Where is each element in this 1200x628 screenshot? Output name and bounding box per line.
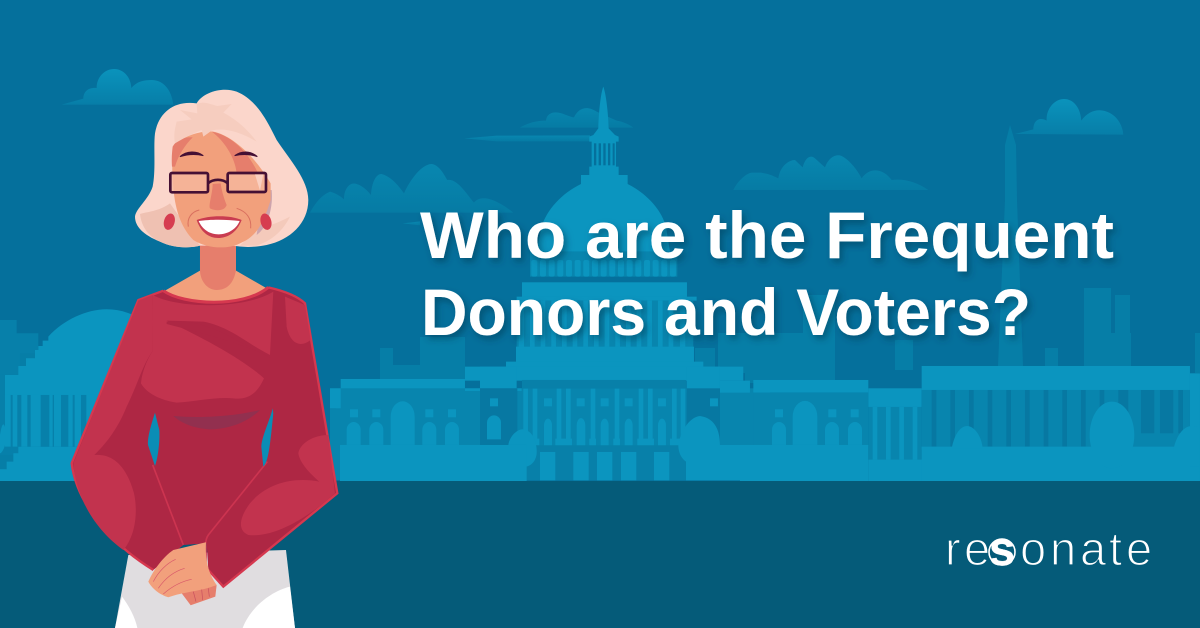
cloud: left of dome	[310, 164, 513, 225]
nose	[210, 183, 227, 210]
woman illustration	[72, 90, 337, 628]
hand	[148, 542, 217, 597]
title	[420, 198, 1114, 349]
hair	[135, 90, 308, 247]
seams	[153, 462, 267, 567]
arm gaps	[148, 413, 159, 466]
wrist	[182, 585, 217, 605]
bangs	[174, 103, 257, 143]
dome and tholos	[465, 87, 743, 381]
head and neck	[135, 90, 308, 313]
glasses	[170, 173, 266, 192]
neck and chest	[163, 243, 268, 313]
cloud: top left	[62, 69, 173, 105]
capitol lower body, left wing, centre portico	[330, 379, 770, 480]
neckline trim	[163, 287, 268, 302]
pants	[115, 550, 295, 628]
sweater highlights	[73, 292, 335, 550]
memorial building at left	[0, 309, 137, 483]
title: Donors and Voters?	[421, 275, 1031, 349]
eyebrows	[180, 152, 203, 157]
washington monument	[998, 125, 1023, 366]
sweater	[72, 287, 337, 605]
cloud: top right	[1015, 99, 1123, 135]
capitol building	[330, 87, 925, 482]
right colonnade building	[922, 366, 1200, 482]
sky background	[0, 0, 1200, 482]
sweater folds	[167, 321, 273, 359]
title: Who are the Frequent	[420, 198, 1114, 272]
earrings	[162, 212, 177, 231]
left wing windows and arches	[330, 401, 527, 482]
far skyline buildings	[0, 288, 1200, 480]
mouth	[197, 216, 242, 238]
smile lines	[188, 208, 251, 228]
cloud: right of dome	[733, 155, 928, 190]
ground band	[0, 481, 1200, 628]
face	[172, 131, 271, 247]
logo: resonate: resonate	[945, 522, 1152, 575]
east wing with arches	[740, 380, 925, 482]
cloud: behind dome spire	[464, 108, 633, 141]
